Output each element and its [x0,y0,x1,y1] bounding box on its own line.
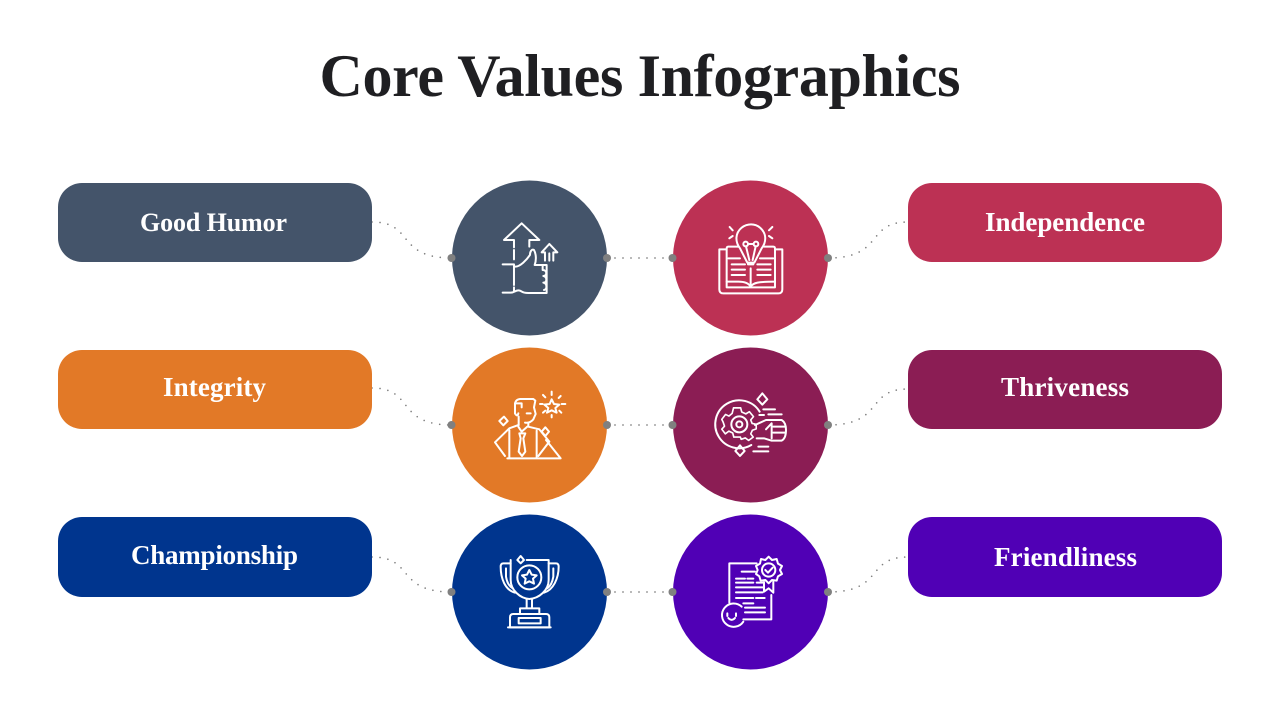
good humor label: Good Humor [140,208,287,237]
championship left node [448,588,456,596]
icon: book with light bulb [719,224,782,293]
panel: good humor row [58,180,673,336]
integrity circle [452,348,607,502]
integrity label: Integrity [163,372,266,402]
connector: good humor to independence [607,257,673,259]
integrity right node [603,421,611,429]
thriveness left node [668,421,676,429]
icon: gear with fist [715,393,786,456]
championship label: Championship [131,540,298,570]
championship right node [603,588,611,596]
good humor circle [452,180,607,336]
icon: trophy with star [501,556,559,627]
panel: thriveness row [668,348,1222,502]
title: Core Values Infographics [320,43,960,109]
thriveness label: Thriveness [1001,372,1129,402]
panel: friendliness row [668,514,1222,670]
friendliness pill [908,517,1222,597]
independence right node [824,254,832,262]
friendliness label: Friendliness [994,542,1137,572]
connector: good humor pill to circle [372,222,452,258]
independence pill [908,183,1222,262]
good humor right node [603,254,611,262]
connector: integrity pill to circle [372,388,452,425]
independence left node [668,254,676,262]
independence circle [673,180,828,336]
integrity left node [448,421,456,429]
icon: businessman with star [495,392,565,458]
good humor pill [58,183,372,262]
icon: certificate with smiley [722,557,782,627]
good humor left node [448,254,456,262]
friendliness circle [673,514,828,670]
championship pill [58,517,372,597]
panel: championship row [58,514,673,670]
integrity pill [58,350,372,429]
connector: championship to friendliness [607,591,673,593]
friendliness left node [668,588,676,596]
thriveness right node [824,421,832,429]
panel: independence row [668,180,1222,336]
connector: championship pill to circle [372,557,452,592]
panel: integrity row [58,348,673,502]
connector: independence circle to pill [828,222,908,258]
thriveness pill [908,350,1222,429]
icon: thumbs up with arrows [503,223,557,293]
connector: thriveness circle to pill [828,389,908,425]
championship circle [452,514,607,670]
connector: friendliness circle to pill [828,557,908,592]
connector: integrity to thriveness [607,424,673,426]
thriveness circle [673,348,828,502]
independence label: Independence [985,207,1145,237]
friendliness right node [824,588,832,596]
